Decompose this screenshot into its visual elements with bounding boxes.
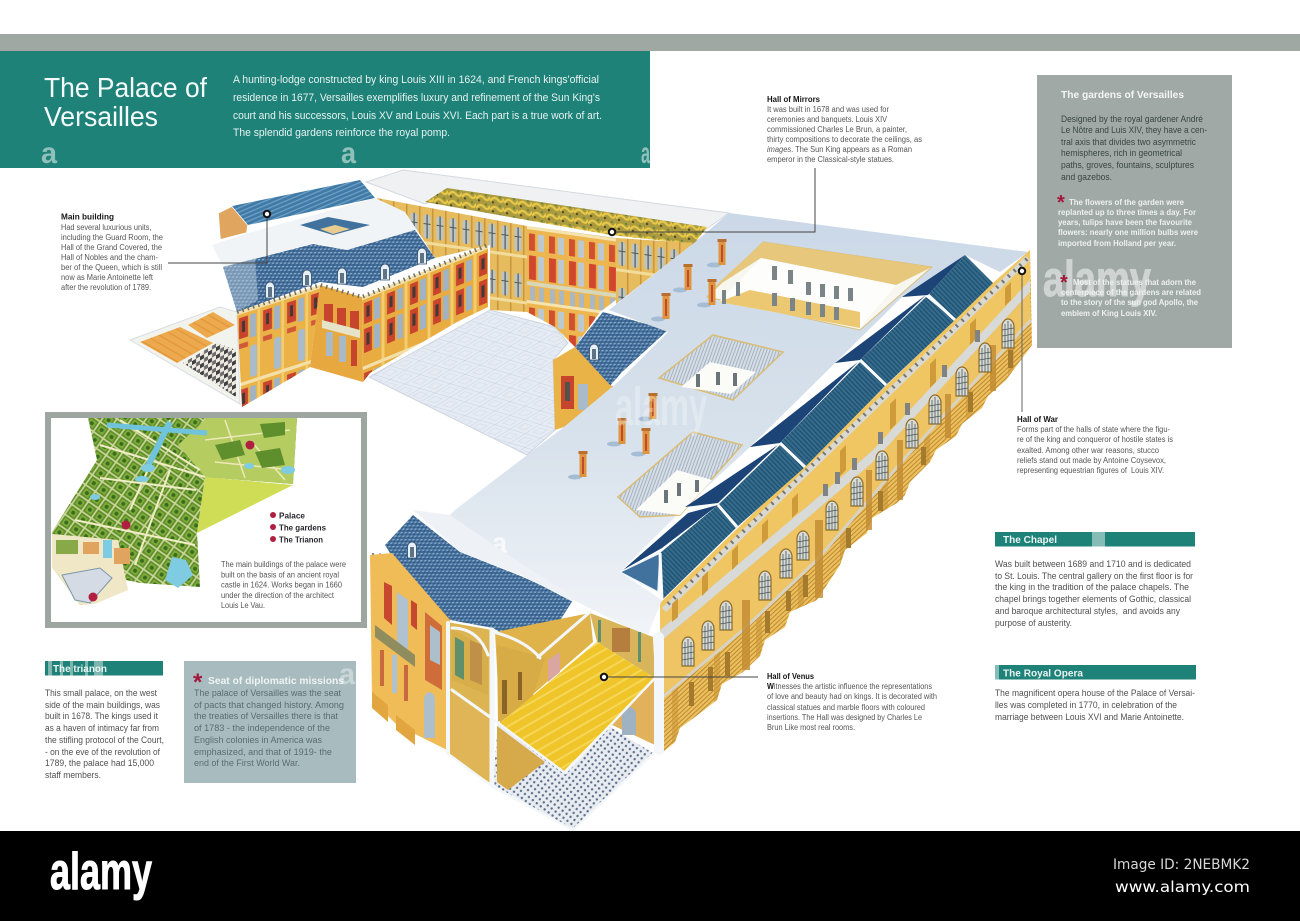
box heading: The gardens of Versailles bbox=[1061, 90, 1184, 101]
label text: commissioned Charles Le Brun, a painter, bbox=[767, 125, 907, 134]
fact: flowers: * bbox=[1057, 192, 1065, 214]
footer bar bbox=[0, 831, 1300, 921]
lower inner courtyard bbox=[618, 432, 742, 517]
label text: after the revolution of 1789. bbox=[61, 283, 151, 292]
callout: Hall of Mirrors bbox=[609, 95, 922, 235]
label text: It was built in 1678 and was used for bbox=[767, 105, 889, 114]
label text: insertions. The Hall was designed by Charles Le bbox=[767, 713, 922, 722]
panel: The gardens of Versailles bbox=[1037, 75, 1232, 348]
fact: flowers: years, tulips have been the favourite bbox=[1058, 218, 1193, 227]
body text: the treaties of Versailles there is that bbox=[194, 711, 338, 721]
title: The Palace of bbox=[44, 72, 207, 103]
label text bbox=[767, 672, 937, 732]
grand roof terrace bbox=[450, 213, 1028, 637]
body text: and gazebos. bbox=[1061, 172, 1112, 182]
upper inner courtyard bbox=[707, 242, 932, 330]
fact: statues: * bbox=[1060, 272, 1068, 294]
body text: of pacts that changed history. Among bbox=[194, 700, 344, 710]
label text: Forms part of the halls of state where the figu- bbox=[1017, 425, 1170, 434]
blue pitched roofs bbox=[620, 255, 993, 600]
front left pavilion bbox=[370, 510, 573, 750]
intro text: A hunting-lodge constructed by king Louis XIII in 1624, and French kings'official bbox=[233, 74, 599, 86]
body text: purpose of austerity. bbox=[995, 618, 1072, 628]
body text: lles was completed in 1770, in celebration of the bbox=[995, 700, 1177, 710]
site url: www.alamy.com bbox=[1115, 878, 1250, 896]
intro text: court and his successors, Louis XV and Louis XVI. Each part is a true work of art. bbox=[233, 110, 602, 122]
fact: statues: Most of the statues that adorn the bbox=[1073, 278, 1197, 287]
body text: The magnificent opera house of the Palace of Versai- bbox=[995, 688, 1195, 698]
body text: The palace of Versailles was the seat bbox=[194, 688, 341, 698]
section bar bbox=[995, 532, 1195, 546]
map legend bbox=[270, 510, 326, 544]
label text: re of the king and conqueror of hostile states is bbox=[1017, 435, 1173, 444]
section bar: The Chapel bbox=[1003, 535, 1057, 546]
fact: statues bbox=[1060, 272, 1201, 318]
label text: now as Marie Antoinette left bbox=[61, 273, 154, 282]
body text: built in 1678. The kings used it bbox=[45, 711, 158, 721]
label text: emperor in the Classical-style statues. bbox=[767, 155, 894, 164]
fact: statues: centerpiece of the gardens are related bbox=[1061, 288, 1201, 297]
middle inner courtyard bbox=[659, 335, 783, 400]
body text: tral axis that divides two asymmetric bbox=[1061, 137, 1196, 147]
marker bbox=[601, 674, 607, 680]
intro text: residence in 1677, Versailles exemplifies luxury and refinement of the Sun King's bbox=[233, 92, 600, 104]
body text: of 1783 - the independence of the bbox=[194, 723, 330, 733]
inset caption: built on the basis of an ancient royal bbox=[221, 570, 339, 580]
body text: English colonies in America was bbox=[194, 735, 322, 745]
label text: representing equestrian figures of Louis XIV. bbox=[1017, 466, 1164, 475]
fact: flowers: imported from Holland per year. bbox=[1058, 239, 1176, 248]
body text: emphasized, and that of 1919- the bbox=[194, 747, 332, 757]
inset caption: The main buildings of the palace were bbox=[221, 560, 347, 569]
body text: - on the eve of the revolution of bbox=[45, 747, 160, 757]
label text: of love and beauty had on kings. It is decorated with bbox=[767, 692, 937, 701]
watermark letters: a bbox=[641, 137, 650, 170]
body text: the king in the tradition of the palace chapels. The bbox=[995, 582, 1189, 592]
body text: to St. Louis. The central gallery on the first floor is for bbox=[995, 571, 1193, 581]
panel: The Royal Opera bbox=[995, 665, 1196, 722]
body text: Was built between 1689 and 1710 and is dedicated bbox=[995, 559, 1191, 569]
image id: Image ID: 2NEBMK2 bbox=[1113, 857, 1250, 873]
watermark letters: a bbox=[341, 137, 356, 170]
body text bbox=[194, 688, 344, 768]
body text: chapel brings together elements of Gothic, classical bbox=[995, 594, 1191, 604]
label text: including the Guard Room, the bbox=[61, 233, 164, 242]
body text: paths, groves, fountains, sculptures bbox=[1061, 160, 1194, 170]
label text: Brun Like most real rooms. bbox=[767, 723, 855, 732]
left floor section bbox=[130, 307, 240, 404]
body text bbox=[995, 559, 1193, 628]
body text: 1789, the palace had 15,000 bbox=[45, 758, 154, 768]
label text: thirty compositions to decorate the ceilings, as bbox=[767, 135, 922, 144]
cutaway Hall of Venus bbox=[447, 612, 659, 830]
label text: Hall of Nobles and the cham- bbox=[61, 253, 158, 262]
map markers bbox=[88, 440, 254, 602]
body text: and baroque architectural styles, and avoids any bbox=[995, 606, 1180, 616]
body text: end of the First World War. bbox=[194, 758, 300, 768]
rear central wing bbox=[366, 170, 729, 347]
label text: images. The Sun King appears as a Roman bbox=[767, 145, 912, 154]
chimneys bbox=[568, 239, 726, 480]
fact: statues: to the story of the sun god Apollo, the bbox=[1061, 298, 1199, 307]
fact: flowers: flowers: nearly one million bulbs were bbox=[1058, 228, 1199, 237]
box heading: Seat of diplomatic missions bbox=[208, 676, 344, 687]
header panel bbox=[0, 51, 650, 170]
map legend: The Trianon bbox=[279, 534, 323, 544]
inset caption: Louis Le Vau. bbox=[221, 601, 265, 610]
body text bbox=[1061, 114, 1207, 182]
callout: Hall of Venus bbox=[601, 672, 937, 732]
inset caption: castle in 1624. Works began in 1660 bbox=[221, 580, 343, 590]
panel: Seat of diplomatic missions bbox=[184, 658, 356, 783]
body text: Designed by the royal gardener André bbox=[1061, 114, 1203, 124]
corner pavilion bbox=[553, 312, 668, 430]
watermark: a bbox=[339, 658, 355, 691]
roof watermark letter: a bbox=[492, 527, 507, 560]
label text: Had several luxurious units, bbox=[61, 223, 152, 232]
inset caption: under the direction of the architect bbox=[221, 591, 335, 600]
label text: Hall of Venus bbox=[767, 672, 815, 681]
body text: This small palace, on the west bbox=[45, 688, 157, 698]
label text: Main building bbox=[61, 212, 114, 222]
centre image watermark: alamy bbox=[615, 377, 707, 437]
section bar bbox=[995, 665, 1196, 680]
panel: The Chapel bbox=[995, 532, 1195, 628]
watermark letters: a bbox=[41, 137, 57, 170]
section bar: The Royal Opera bbox=[1003, 668, 1083, 680]
label text: Hall of the Grand Covered, the bbox=[61, 243, 163, 252]
main building bbox=[212, 180, 488, 407]
label text: classical statues and marble floors with coloured bbox=[767, 703, 925, 712]
body text bbox=[995, 688, 1195, 722]
body text: as a haven of intimacy far from bbox=[45, 723, 159, 733]
asterisk: * bbox=[193, 669, 203, 696]
marker bbox=[264, 211, 270, 217]
fact: flowers: replanted up to three times a day. For bbox=[1058, 208, 1196, 217]
courtyard bbox=[369, 310, 568, 455]
inset caption bbox=[221, 560, 347, 610]
panel: The trianon bbox=[45, 661, 164, 780]
intro text: The splendid gardens reinforce the royal pomp. bbox=[233, 127, 450, 139]
lower right facade bbox=[660, 250, 1032, 752]
top grey band bbox=[0, 34, 1300, 51]
label text: ceremonies and banquets. Louis XIV bbox=[767, 115, 888, 124]
label text bbox=[1017, 415, 1173, 475]
body text: staff members. bbox=[45, 770, 101, 780]
map legend: The gardens bbox=[279, 522, 326, 532]
label text bbox=[61, 212, 164, 292]
fact: statues: emblem of King Louis XIV. bbox=[1061, 309, 1157, 318]
callout: Main building bbox=[61, 211, 270, 292]
map legend: Palace bbox=[279, 510, 305, 520]
label text: Witnesses the artistic influence the representations bbox=[767, 682, 932, 691]
watermark letters bbox=[41, 137, 650, 170]
callout: Hall of War bbox=[1017, 268, 1173, 475]
palace illustration bbox=[130, 170, 1032, 830]
label text: reliefs stand out made by Antoine Coysevox, bbox=[1017, 456, 1166, 465]
label text: ber of the Queen, which is still bbox=[61, 263, 162, 272]
label text: Hall of War bbox=[1017, 415, 1058, 424]
fact: flowers bbox=[1057, 192, 1199, 248]
label text: exalted. Among other war reasons, stucco bbox=[1017, 446, 1160, 455]
intro text bbox=[233, 74, 602, 139]
body text: marriage between Louis XVI and Marie Antoinette. bbox=[995, 712, 1184, 722]
title: Versailles bbox=[44, 101, 158, 132]
alamy logo: alamy bbox=[50, 843, 152, 901]
body text bbox=[45, 688, 164, 780]
title bbox=[44, 72, 207, 132]
marker bbox=[1019, 268, 1025, 274]
body text: side of the main buildings, was bbox=[45, 700, 160, 710]
body text: hemispheres, rich in geometrical bbox=[1061, 148, 1182, 158]
fact: flowers: The flowers of the garden were bbox=[1069, 198, 1185, 207]
body text: Le Nôtre and Luis XIV, they have a cen- bbox=[1061, 125, 1207, 135]
section bar: The trianon bbox=[53, 664, 107, 675]
body text: the stifling protocol of the Court, bbox=[45, 735, 164, 745]
label text bbox=[767, 95, 922, 164]
label text: Hall of Mirrors bbox=[767, 95, 821, 104]
watermark: alamy bbox=[1043, 251, 1151, 307]
panel: gardens map inset bbox=[48, 415, 364, 625]
marker bbox=[609, 229, 615, 235]
garden map bbox=[52, 418, 297, 605]
